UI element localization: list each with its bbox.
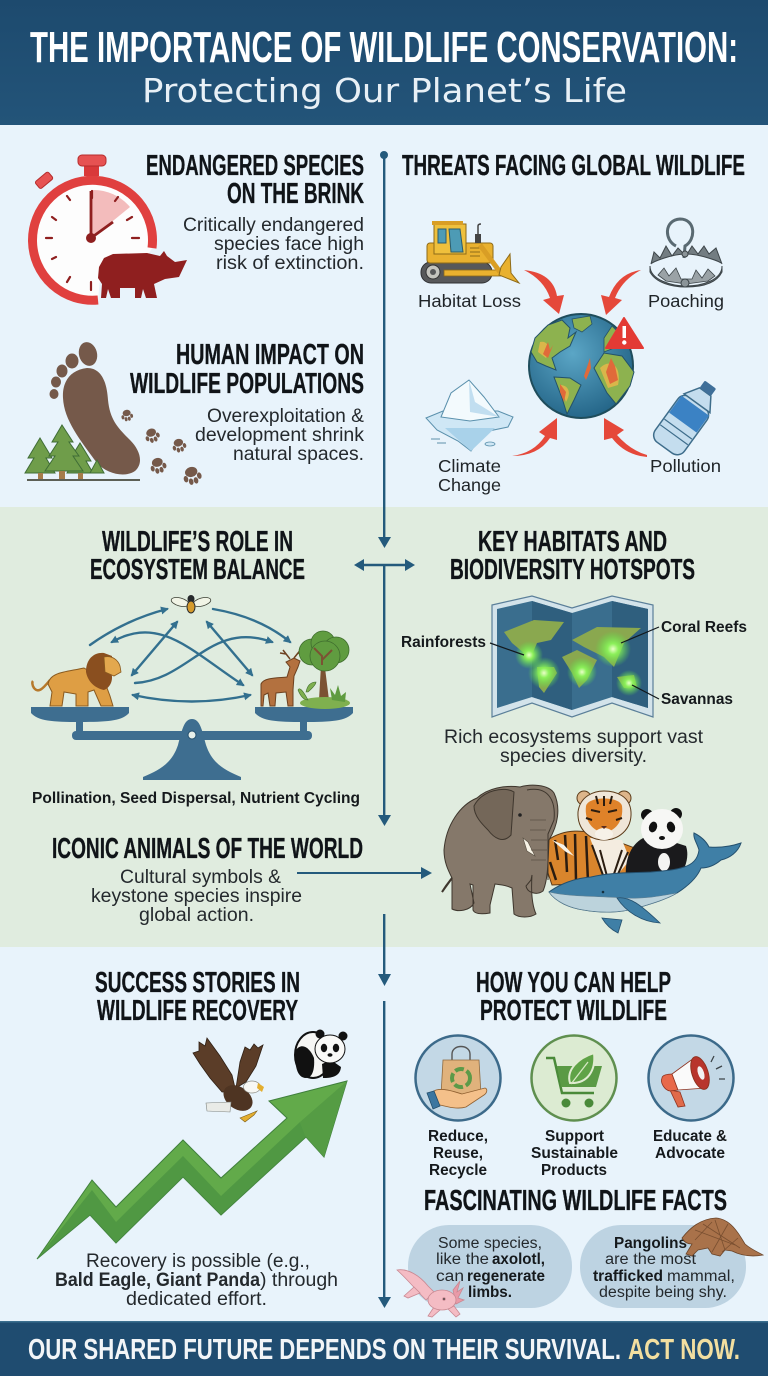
illustration: pangolin <box>682 1218 763 1256</box>
heading: endangered species: ENDANGERED SPECIES <box>146 150 364 182</box>
text: human impact <box>195 406 365 465</box>
arrow: poaching to globe <box>601 270 641 315</box>
text: human impact: natural spaces. <box>233 444 364 465</box>
icon: megaphone <box>648 1036 734 1120</box>
text: rich ecosystems <box>444 727 704 767</box>
text: endangered species: Critically endangered <box>183 215 364 236</box>
icon: sustainable shopping cart <box>532 1036 616 1120</box>
caption: educate and advocate: Educate & <box>653 1128 727 1145</box>
heading: human impact: HUMAN IMPACT ON <box>176 339 364 371</box>
illustration: panda <box>626 808 687 878</box>
icon: folded world map <box>490 596 659 717</box>
label: climate change: Change <box>438 475 501 495</box>
arrow: pollution to globe <box>604 418 647 457</box>
panel: how you can help <box>416 967 734 1179</box>
heading: human impact <box>130 339 364 400</box>
caption: reduce reuse recycle: Reuse, <box>433 1145 483 1162</box>
arrow: habitat loss to globe <box>524 270 564 314</box>
heading: endangered species <box>146 150 364 210</box>
bubble: axolotl fact: Some species, <box>438 1235 542 1252</box>
panel: threats <box>402 150 745 495</box>
label: savannas: Savannas <box>661 691 733 708</box>
bubble: axolotl fact: regenerate <box>467 1268 545 1285</box>
bubble: axolotl fact: like the <box>436 1251 489 1268</box>
label: pollution: Pollution <box>650 456 721 476</box>
panel: key habitats <box>401 526 747 767</box>
heading: how you can help <box>476 967 671 1027</box>
caption: educate and advocate <box>653 1128 727 1162</box>
text: recovery: ) through <box>260 1270 338 1291</box>
text: iconic animals <box>91 867 302 926</box>
icon: threatened globe <box>529 314 643 418</box>
caption: reduce reuse recycle: Recycle <box>429 1162 487 1179</box>
bubble: axolotl fact: can <box>436 1268 464 1285</box>
bubble: pangolin fact: are the most <box>605 1251 697 1268</box>
central timeline with arrows <box>297 151 432 1308</box>
label: climate change: Climate <box>438 456 501 476</box>
caption: reduce reuse recycle: Reduce, <box>428 1128 488 1145</box>
icon: footprint, trees and paws <box>25 340 203 487</box>
text: endangered species: species face high <box>214 234 364 255</box>
icon: bee <box>170 595 212 613</box>
bubble: pangolin fact: mammal, <box>667 1268 735 1285</box>
text: recovery <box>55 1251 338 1310</box>
bubble: axolotl fact: axolotl, <box>492 1251 545 1268</box>
illustration: axolotl <box>397 1270 464 1317</box>
icon: deer <box>261 648 303 706</box>
heading: key habitats <box>450 526 695 586</box>
icon: plastic bottle <box>650 374 725 458</box>
illustration: whale <box>549 833 741 933</box>
caption: support sustainable products: Support <box>545 1128 604 1145</box>
icon: stopwatch with rhino <box>33 155 187 300</box>
panel: iconic animals <box>52 785 741 933</box>
heading: how you can help: PROTECT WILDLIFE <box>480 995 667 1027</box>
caption: educate and advocate: Advocate <box>655 1145 725 1162</box>
icon: bulldozer <box>421 221 519 283</box>
illustration: tiger <box>547 791 640 886</box>
heading: key habitats: KEY HABITATS AND <box>478 526 667 558</box>
icon: bald eagle <box>193 1038 264 1122</box>
arrow: climate change to globe <box>512 418 557 456</box>
heading: iconic animals: ICONIC ANIMALS OF THE WORLD <box>52 833 363 865</box>
text: iconic animals: global action. <box>139 905 254 926</box>
icon: balance scale <box>31 707 353 780</box>
text: iconic animals: keystone species inspire <box>91 886 302 907</box>
label: poaching: Poaching <box>648 291 724 311</box>
text: recovery: dedicated effort. <box>126 1289 267 1310</box>
text: recovery: Bald Eagle, Giant Panda <box>55 1270 260 1291</box>
text: human impact: Overexploitation & <box>207 406 364 427</box>
heading: how you can help: HOW YOU CAN HELP <box>476 967 671 999</box>
text: endangered species <box>183 215 364 274</box>
panel: ecosystem balance <box>31 526 360 807</box>
caption: ecosystem services: Pollination, Seed Dispersal, Nutrient Cycling <box>32 790 360 807</box>
bubble: pangolin fact: despite being shy. <box>599 1284 727 1301</box>
text: endangered species: risk of extinction. <box>216 253 364 274</box>
icon: reusable bag in hand <box>416 1036 500 1120</box>
caption: support sustainable products: Products <box>541 1162 607 1179</box>
header banner <box>0 0 768 125</box>
text: rich ecosystems: Rich ecosystems support vast <box>444 727 704 748</box>
bubble: pangolin fact <box>580 1225 746 1308</box>
bubble: pangolin fact: trafficked <box>593 1268 663 1285</box>
text: iconic animals: Cultural symbols & <box>120 867 281 888</box>
heading: endangered species: ON THE BRINK <box>227 178 364 210</box>
heading: ecosystem balance: ECOSYSTEM BALANCE <box>90 554 305 586</box>
icon: panda <box>295 1030 348 1078</box>
heading: human impact: WILDLIFE POPULATIONS <box>130 368 364 400</box>
bubble: axolotl fact <box>408 1225 572 1308</box>
panel: fascinating facts <box>397 1185 763 1317</box>
text: rich ecosystems: species diversity. <box>500 746 647 767</box>
caption: reduce reuse recycle <box>428 1128 488 1179</box>
heading: ecosystem balance <box>90 526 305 586</box>
label: habitat loss: Habitat Loss <box>418 291 521 311</box>
bubble: axolotl fact: limbs. <box>468 1284 512 1301</box>
label: coral reefs: Coral Reefs <box>661 619 747 636</box>
heading: success stories <box>95 967 300 1027</box>
label: rainforests: Rainforests <box>401 634 486 651</box>
icon: steel trap <box>650 219 722 287</box>
footer banner <box>0 1321 768 1376</box>
text: recovery: Recovery is possible (e.g., <box>86 1251 310 1272</box>
chart: rising green arrow <box>37 1081 347 1259</box>
cycle arrows <box>90 609 290 702</box>
illustration: elephant <box>442 785 558 917</box>
text: human impact: development shrink <box>195 425 365 446</box>
panel: human impact <box>25 339 365 487</box>
caption: support sustainable products: Sustainable <box>531 1145 618 1162</box>
panel: endangered species <box>33 150 364 300</box>
heading: success stories: WILDLIFE RECOVERY <box>97 995 298 1027</box>
bubble: pangolin fact: Pangolins <box>614 1235 687 1252</box>
label: climate change <box>438 456 501 495</box>
subtitle: Protecting Our Planet’s Life <box>142 71 627 110</box>
icon: lion <box>32 653 121 706</box>
icon: tree and plants <box>298 631 350 709</box>
caption: support sustainable products <box>531 1128 618 1179</box>
heading: ecosystem balance: WILDLIFE’S ROLE IN <box>102 526 293 558</box>
icon: iceberg <box>426 380 513 451</box>
heading: success stories: SUCCESS STORIES IN <box>95 967 300 999</box>
panel: success stories <box>37 967 348 1310</box>
